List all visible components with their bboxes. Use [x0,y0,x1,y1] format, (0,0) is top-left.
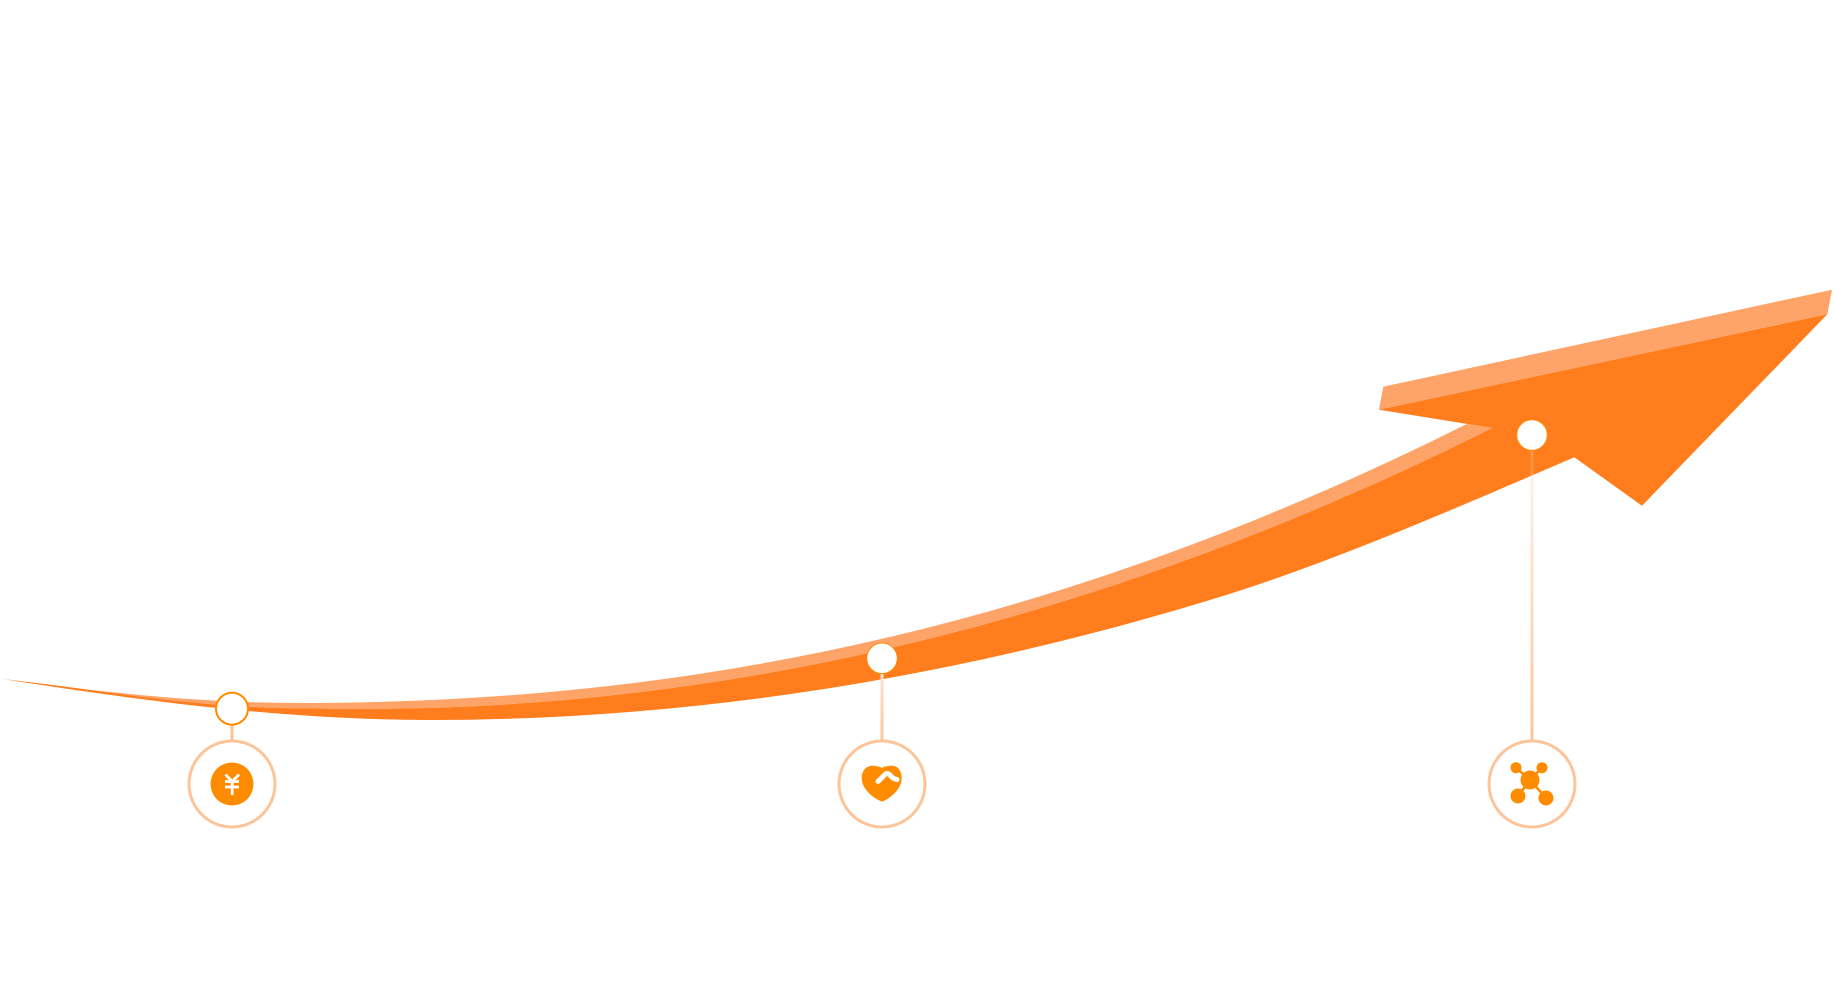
arrow head highlight band [1379,290,1832,410]
connector line 1 [230,724,234,742]
arrow [3,290,1832,720]
icon: heart in ring [839,741,925,827]
arrow body [3,314,1827,720]
icon: network nodes in ring [1489,741,1575,827]
marker dot 2 [867,643,897,674]
arrow shaft highlight band [3,424,1492,709]
connector line 3 [1530,450,1534,741]
marker dot 3 [1517,420,1547,450]
connector line 2 [880,672,884,742]
icon: yen coin in ring [189,741,275,827]
marker dot 1 [216,693,248,725]
